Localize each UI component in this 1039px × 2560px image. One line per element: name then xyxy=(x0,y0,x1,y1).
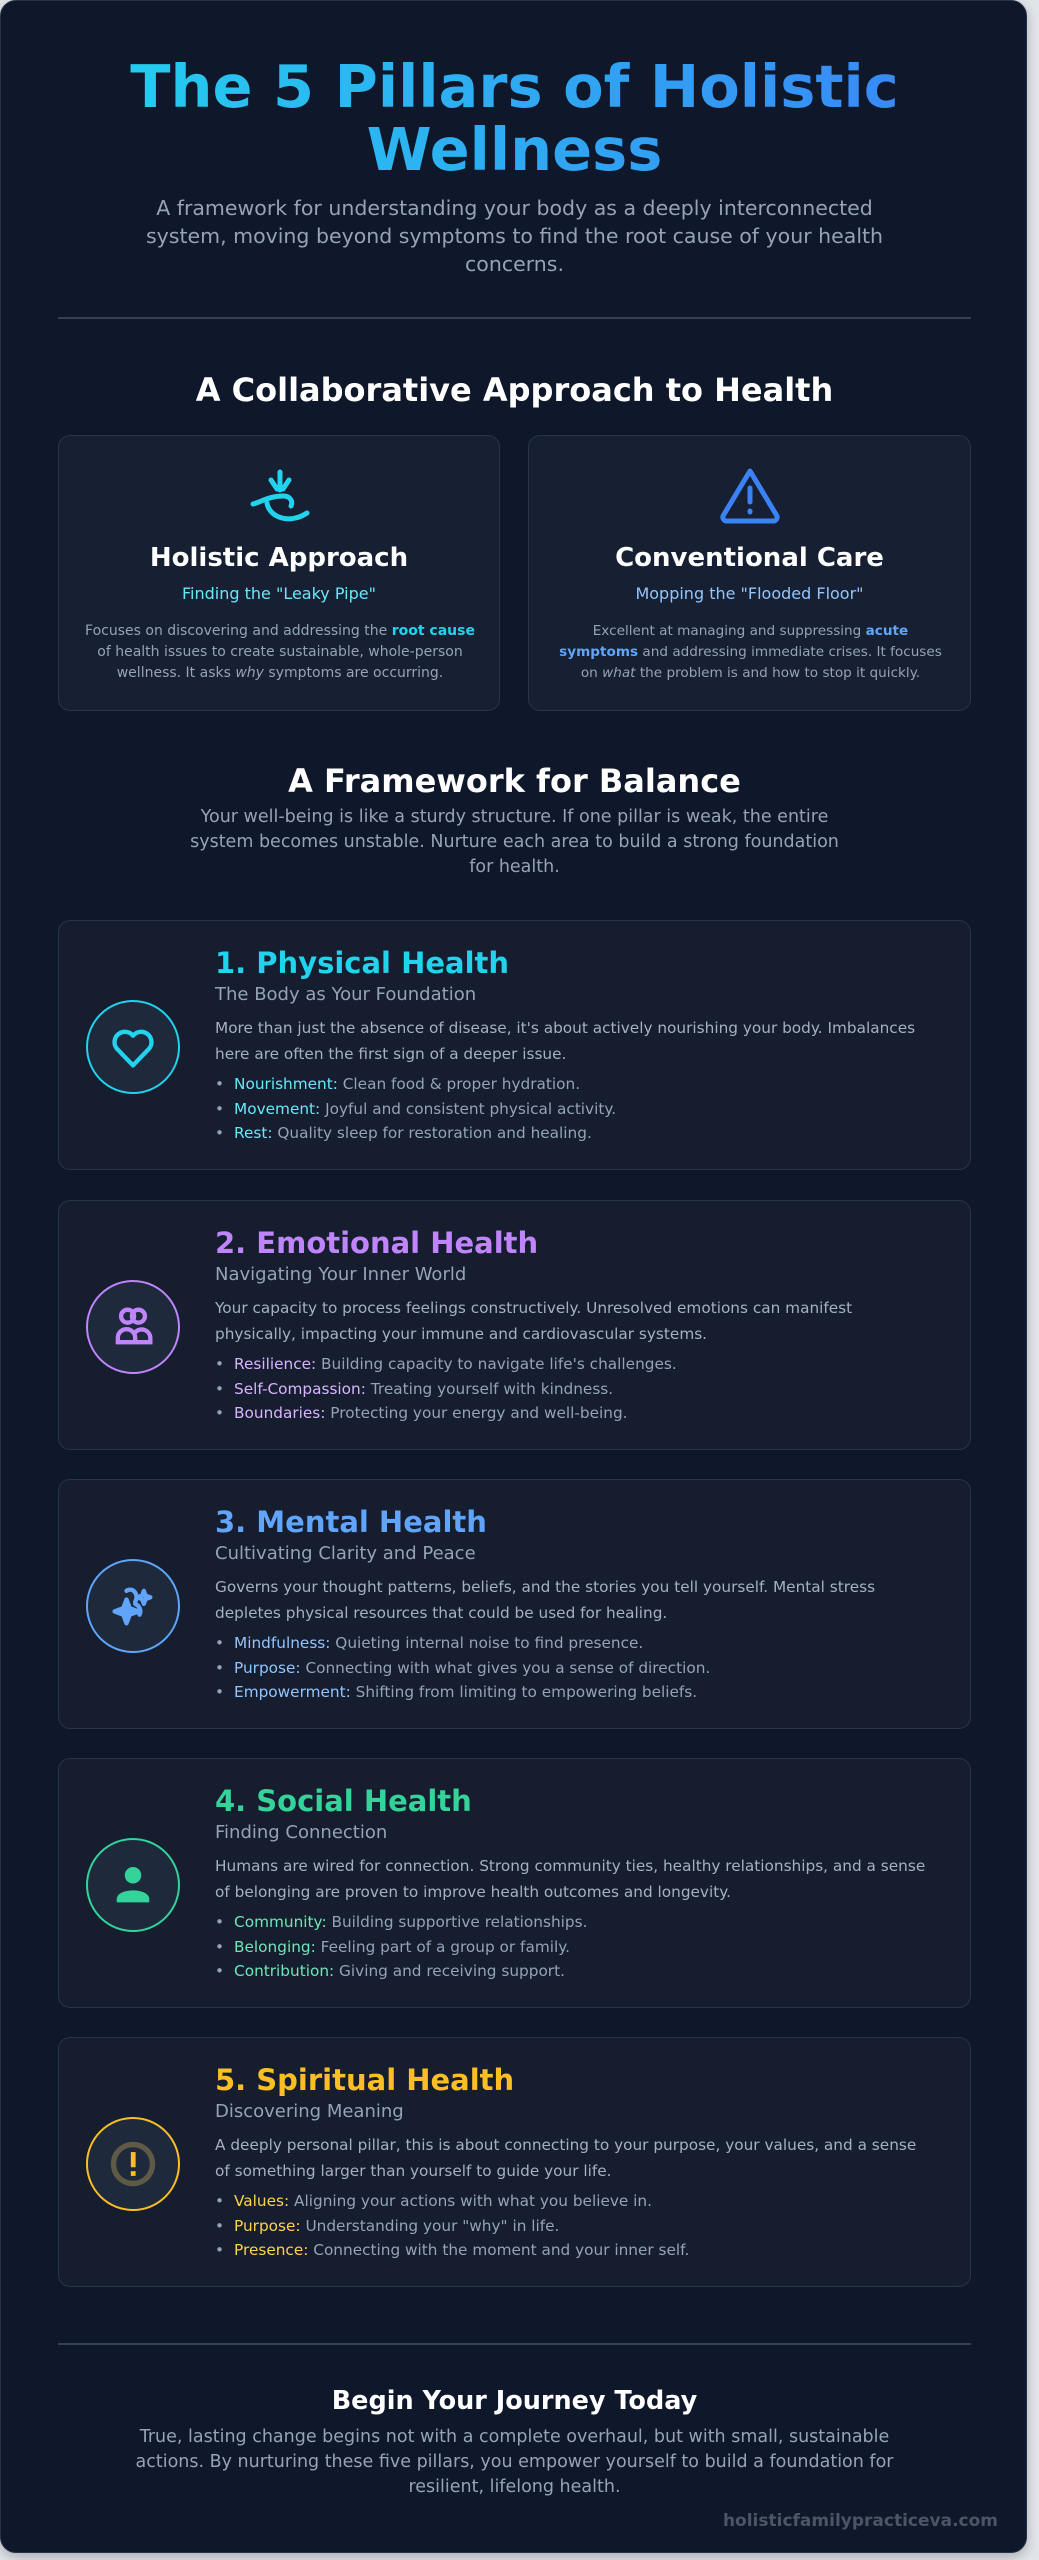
closing text: True, lasting change begins not with a complete overhaul, but with small, sustainable actions. By nurturing these five pillars, you empower yourself to build a foundation for resilient, lifelong health. xyxy=(136,2427,893,2497)
panel: social health: Community: Building supportive relationships. xyxy=(234,1913,587,1931)
panel: spiritual health: Purpose: Understanding your "why" in life. xyxy=(234,2216,559,2234)
body text: Excellent at managing and suppressing acute xyxy=(593,623,908,639)
panel: mental health: Empowerment: Shifting from limiting to empowering beliefs. xyxy=(234,1683,697,1701)
heading: begin your journey: Begin Your Journey Today xyxy=(332,2386,697,2416)
intro text: Your well-being is like a sturdy structure. If one pillar is weak, the entire system becomes unstable. Nurture each area to build a strong foundation for health. xyxy=(190,807,839,877)
panel: emotional health: Boundaries: Protecting your energy and well-being. xyxy=(234,1404,628,1422)
panel: physical health: The Body as Your Foundation xyxy=(215,984,476,1005)
panel: conventional care xyxy=(528,435,971,711)
body text: symptoms and addressing immediate crises. It focuses xyxy=(559,644,942,660)
panel: spiritual health: 5. Spiritual Health xyxy=(215,2063,514,2097)
footer: domain: holisticfamilypracticeva.com xyxy=(723,2511,998,2531)
panel: social health: Humans are wired for connection. Strong community ties, healthy relationships, and a sense of belonging are proven to improve health outcomes and longevity. xyxy=(215,1857,925,1901)
panel: mental health xyxy=(58,1479,971,1729)
panel: emotional health xyxy=(58,1200,971,1450)
panel: mental health: Cultivating Clarity and Peace xyxy=(215,1543,476,1564)
panel: mental health: Purpose: Connecting with what gives you a sense of direction. xyxy=(234,1658,710,1676)
panel: social health: Contribution: Giving and receiving support. xyxy=(234,1962,565,1980)
panel: physical health: Movement: Joyful and consistent physical activity. xyxy=(234,1100,616,1118)
icon: warning xyxy=(720,468,780,524)
panel: social health: 4. Social Health xyxy=(215,1784,472,1818)
body text xyxy=(559,623,942,681)
title: The 5 Pillars of Holistic xyxy=(130,52,899,121)
panel: emotional health: Self-Compassion: Treating yourself with kindness. xyxy=(234,1380,613,1398)
panel: social health xyxy=(58,1758,971,2008)
icon: users xyxy=(86,1280,180,1374)
icon: leaky pipe xyxy=(250,470,310,522)
panel: emotional health: Your capacity to process feelings constructively. Unresolved emotions can manifest physically, impacting your immune and cardiovascular systems. xyxy=(215,1299,852,1343)
panel: spiritual health xyxy=(58,2037,971,2287)
panel: emotional health: Navigating Your Inner World xyxy=(215,1264,466,1285)
panel: physical health: 1. Physical Health xyxy=(215,946,509,980)
heading: framework for balance: A Framework for Balance xyxy=(288,762,741,800)
panel: holistic approach: Holistic Approach xyxy=(150,543,408,573)
panel: mental health: Governs your thought patterns, beliefs, and the stories you tell yourself. Mental stress depletes physical resources that could be used for healing. xyxy=(215,1578,875,1622)
heading: collaborative approach: A Collaborative Approach to Health xyxy=(196,371,833,409)
panel: emotional health: Resilience: Building capacity to navigate life's challenges. xyxy=(234,1355,677,1373)
panel: spiritual health: Presence: Connecting with the moment and your inner self. xyxy=(234,2241,689,2259)
panel: mental health: Mindfulness: Quieting internal noise to find presence. xyxy=(234,1634,643,1652)
panel: spiritual health: A deeply personal pillar, this is about connecting to your purpose, your values, and a sense of something larger than yourself to guide your life. xyxy=(215,2136,916,2180)
panel: social health: Finding Connection xyxy=(215,1822,387,1843)
panel: social health: Belonging: Feeling part of a group or family. xyxy=(234,1938,570,1956)
panel: physical health: Nourishment: Clean food & proper hydration. xyxy=(234,1075,580,1093)
subtitle: A framework for understanding your body as a deeply interconnected system, moving beyond symptoms to find the root cause of your health concerns. xyxy=(146,196,883,276)
title xyxy=(41,55,988,181)
panel: conventional care: Conventional Care xyxy=(615,543,884,573)
icon: sparkles xyxy=(86,1559,180,1653)
icon: alert circle xyxy=(86,2117,180,2211)
icon: heart xyxy=(86,1000,180,1094)
panel: holistic approach xyxy=(58,435,500,711)
panel: physical health: Rest: Quality sleep for restoration and healing. xyxy=(234,1124,592,1142)
body text: on what the problem is and how to stop it quickly. xyxy=(581,665,920,681)
panel: spiritual health: Discovering Meaning xyxy=(215,2101,404,2122)
panel: emotional health: 2. Emotional Health xyxy=(215,1226,538,1260)
panel: physical health xyxy=(58,920,971,1170)
body text: Focuses on discovering and addressing the root cause of health issues to create sustainable, whole-person wellness. It asks why symptoms are occurring. xyxy=(85,623,475,681)
icon: person xyxy=(86,1838,180,1932)
tagline: Mopping the "Flooded Floor" xyxy=(635,584,864,603)
panel: mental health: 3. Mental Health xyxy=(215,1505,487,1539)
tagline: Finding the "Leaky Pipe" xyxy=(182,584,376,603)
panel: spiritual health: Values: Aligning your actions with what you believe in. xyxy=(234,2192,652,2210)
title: Wellness xyxy=(367,115,662,184)
panel: physical health: More than just the absence of disease, it's about actively nourishing your body. Imbalances here are often the first sign of a deeper issue. xyxy=(215,1019,915,1063)
